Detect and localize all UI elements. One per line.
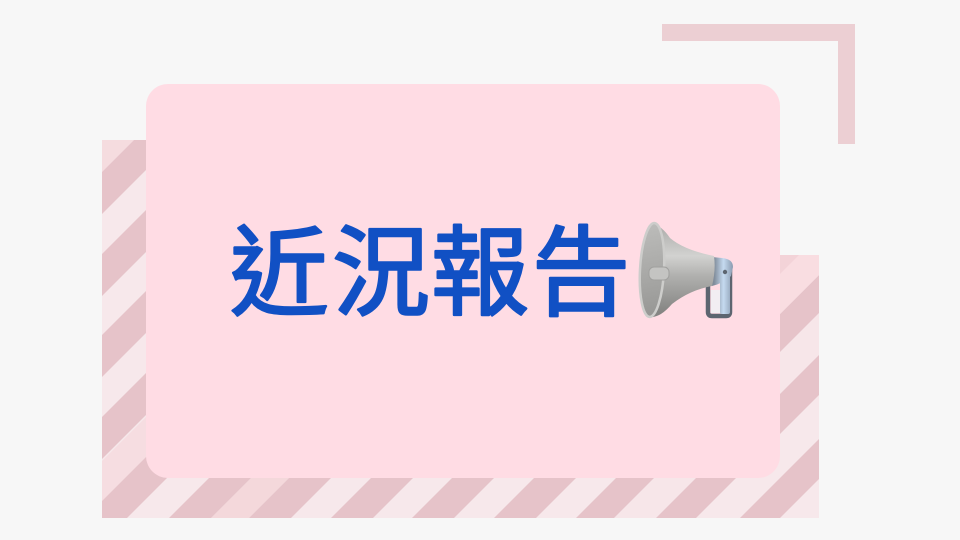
megaphone handle bbox=[708, 268, 730, 316]
megaphone collar bbox=[712, 257, 733, 286]
title bbox=[230, 194, 630, 336]
main pink card bbox=[146, 84, 780, 478]
icon: megaphone bbox=[638, 222, 733, 318]
title: 近 bbox=[230, 194, 328, 336]
title: 告 bbox=[532, 194, 630, 336]
megaphone bell bbox=[638, 222, 666, 318]
corner bracket bbox=[662, 24, 855, 144]
title: 報 bbox=[431, 194, 529, 336]
megaphone driver bbox=[649, 267, 669, 280]
megaphone horn bbox=[650, 224, 715, 317]
striped backing panel bbox=[102, 140, 819, 518]
title: 況 bbox=[332, 194, 430, 336]
